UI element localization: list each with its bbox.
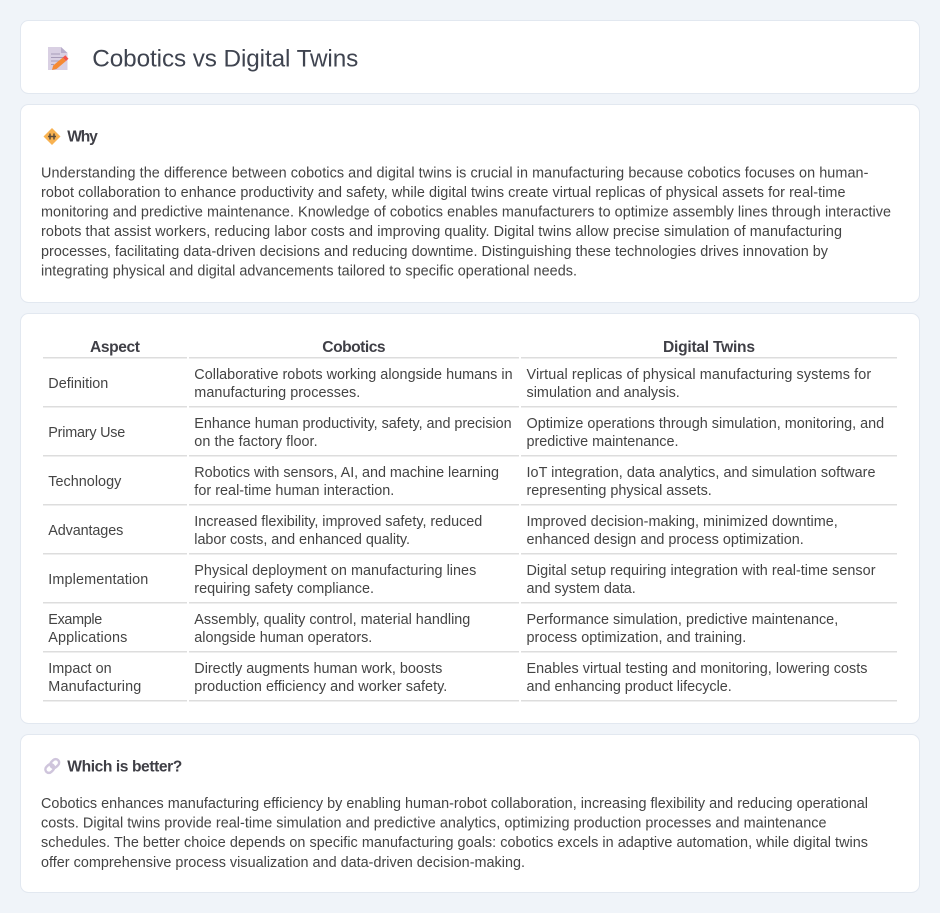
row: advantages: Advantages <box>48 523 123 539</box>
table header row <box>90 339 755 356</box>
row: example applications: alongside human operators. <box>194 630 372 646</box>
row: example applications: Example <box>48 612 102 628</box>
title: Cobotics vs Digital Twins <box>92 46 358 72</box>
heading: which is better: Which is better? <box>67 759 182 776</box>
row: definition: simulation and analysis. <box>526 385 680 401</box>
row: example applications: Assembly, quality control, material handling <box>194 612 470 628</box>
row: advantages: Increased flexibility, improved safety, reduced <box>194 514 482 530</box>
row: example applications: Performance simulation, predictive maintenance, <box>526 612 838 628</box>
text block: why paragraph: monitoring and predictive maintenance. Knowledge of cobotics enables manufacturers to optimize assembly lines through interactive <box>41 205 891 221</box>
row: implementation: Physical deployment on manufacturing lines <box>194 563 476 579</box>
row: impact on manufacturing: Manufacturing <box>48 679 141 695</box>
row: advantages: labor costs, and enhanced quality. <box>194 532 410 548</box>
row: primary use: on the factory floor. <box>194 434 318 450</box>
row: advantages: enhanced design and process optimization. <box>526 532 804 548</box>
row: primary use <box>48 416 884 450</box>
icon: link <box>44 758 61 774</box>
row: impact on manufacturing <box>48 661 868 695</box>
table header row: Aspect <box>90 339 140 356</box>
text block: why paragraph <box>41 166 891 279</box>
icon: memo with pencil <box>48 47 68 70</box>
text block: why paragraph: processes, facilitating data-driven decisions and reducing downtime. Distinguishing these technologies drives innovation by <box>41 244 829 260</box>
panel: title header <box>20 20 920 94</box>
icon: diamond sign <box>44 128 60 145</box>
row: definition: Collaborative robots working alongside humans in <box>194 367 513 383</box>
text block: why paragraph: integrating physical and digital advancements tailored to specific operational needs. <box>41 263 577 279</box>
row: impact on manufacturing: Enables virtual testing and monitoring, lowering costs <box>526 661 868 677</box>
row: impact on manufacturing: and enhancing product lifecycle. <box>526 679 732 695</box>
row: technology: representing physical assets. <box>526 483 712 499</box>
row: primary use: Enhance human productivity, safety, and precision <box>194 416 512 432</box>
row: impact on manufacturing: Impact on <box>48 661 112 677</box>
text block: verdict paragraph <box>41 796 868 871</box>
row: implementation: Digital setup requiring integration with real-time sensor <box>526 563 876 579</box>
row: impact on manufacturing: production efficiency and worker safety. <box>194 679 447 695</box>
row: implementation: Implementation <box>48 572 148 588</box>
row: advantages: Improved decision-making, minimized downtime, <box>526 514 838 530</box>
row: technology: Technology <box>48 474 122 490</box>
text block: verdict paragraph: schedules. The better choice depends on specific manufacturing goals: cobotics excels in adaptive automation, while digital twins <box>41 835 868 851</box>
table header row: Digital Twins <box>663 339 755 356</box>
row: definition <box>48 367 871 401</box>
heading: why: Why <box>67 129 98 146</box>
row: implementation: requiring safety compliance. <box>194 581 374 597</box>
row: technology: for real-time human interaction. <box>194 483 394 499</box>
row: impact on manufacturing: Directly augments human work, boosts <box>194 661 442 677</box>
text block: verdict paragraph: offer comprehensive process visualization and data-driven decision-making. <box>41 855 525 871</box>
row: primary use: Optimize operations through simulation, monitoring, and <box>526 416 884 432</box>
row: primary use: predictive maintenance. <box>526 434 678 450</box>
row: technology: Robotics with sensors, AI, and machine learning <box>194 465 499 481</box>
text block: verdict paragraph: Cobotics enhances manufacturing efficiency by enabling human-robot collaboration, increasing flexibility and reducing operational <box>41 796 868 812</box>
row: definition: manufacturing processes. <box>194 385 360 401</box>
row: definition: Virtual replicas of physical manufacturing systems for <box>526 367 871 383</box>
row: example applications: Applications <box>48 630 127 646</box>
row: definition: Definition <box>48 376 108 392</box>
row: example applications: process optimization, and training. <box>526 630 746 646</box>
table header row: Cobotics <box>322 339 386 356</box>
row: implementation: and system data. <box>526 581 636 597</box>
row: example applications <box>48 612 838 646</box>
panel: comparison table <box>20 314 920 724</box>
panel: why <box>20 104 920 302</box>
text block: why paragraph: robot collaboration to enhance productivity and safety, while digital twins create virtual replicas of physical assets for real-time <box>41 185 846 201</box>
text block: verdict paragraph: costs. Digital twins provide real-time simulation and predictive analytics, optimizing production processes and maintenance <box>41 816 826 832</box>
row: technology: IoT integration, data analytics, and simulation software <box>526 465 876 481</box>
row: implementation <box>48 563 876 597</box>
text block: why paragraph: robots that assist workers, reducing labor costs and improving quality. Digital twins allow precise simulation of manufacturing <box>41 224 842 240</box>
row: technology <box>48 465 876 499</box>
panel: which is better <box>20 734 920 892</box>
row: advantages <box>48 514 838 548</box>
row: primary use: Primary Use <box>48 425 125 441</box>
text block: why paragraph: Understanding the difference between cobotics and digital twins is crucial in manufacturing because cobotics focuses on human- <box>41 166 869 182</box>
